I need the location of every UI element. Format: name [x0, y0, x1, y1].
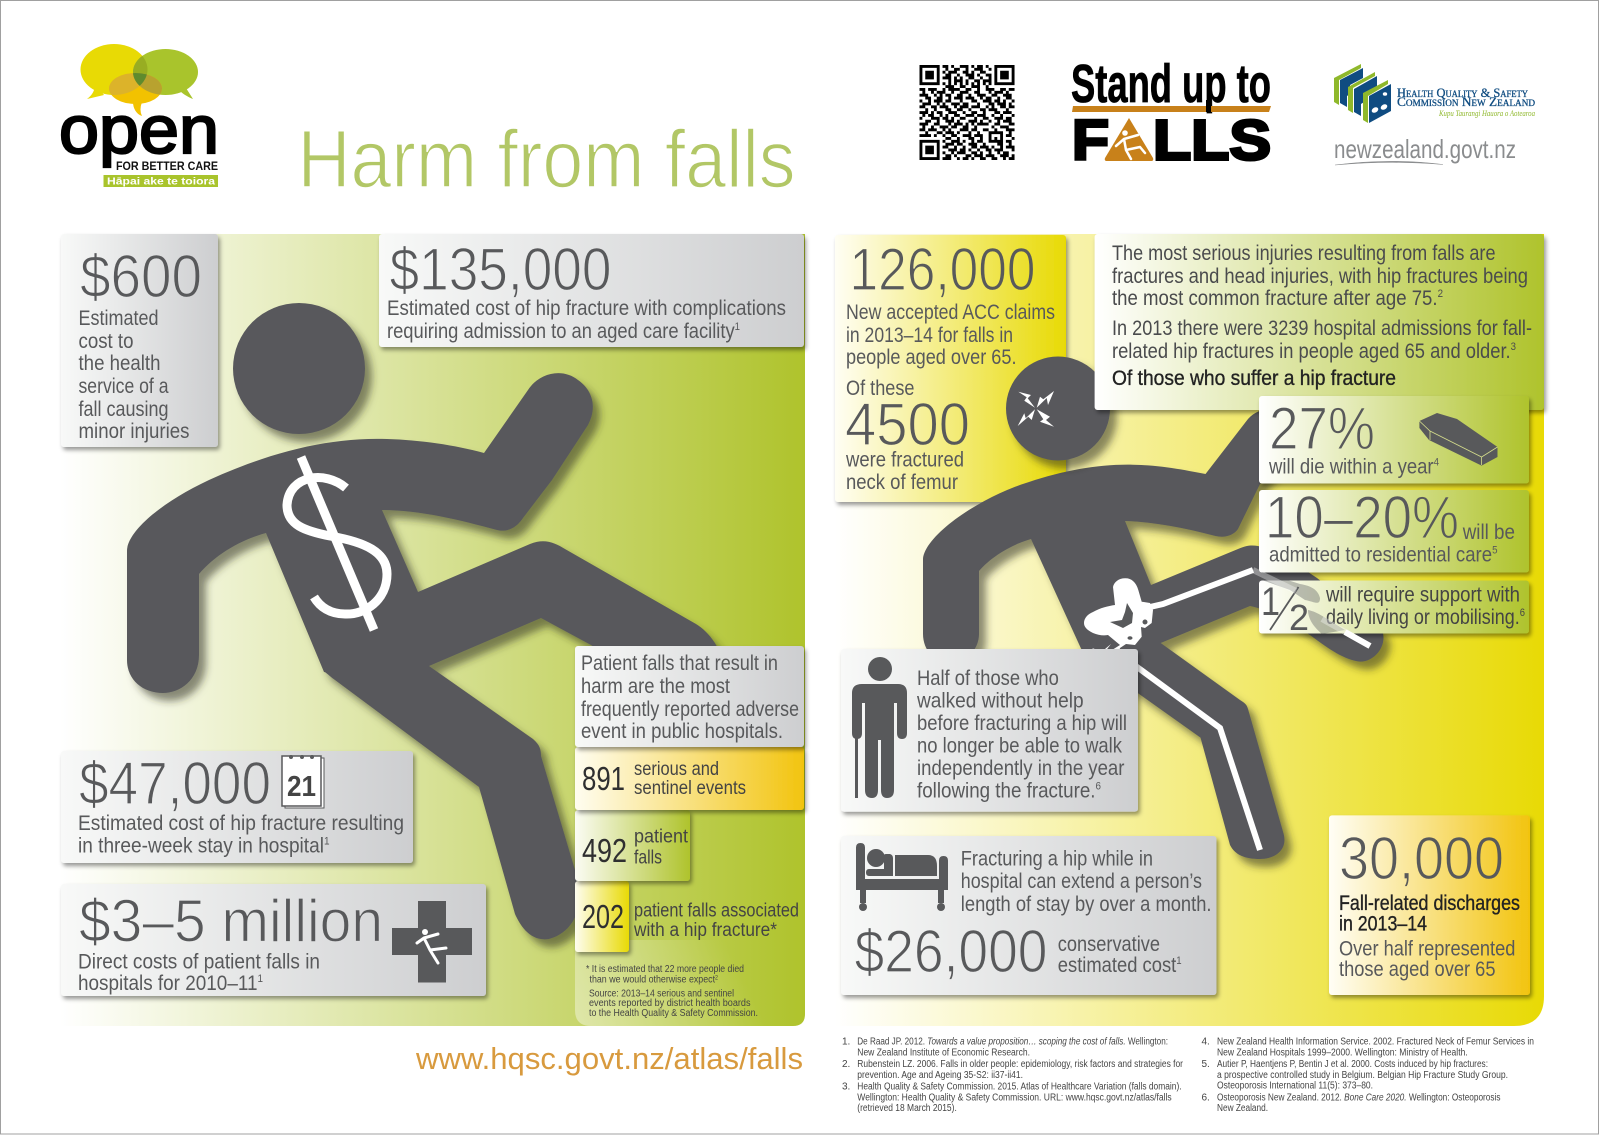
callout: 27% will die: 4 [1434, 457, 1439, 469]
bar: 891 serious and sentinel events: serious and [634, 759, 719, 780]
description: cost to [78, 330, 134, 353]
description: Of these [846, 377, 914, 400]
footnote and source: events reported by district health boards [589, 998, 750, 1009]
logo: stand up to falls [1071, 54, 1271, 172]
callout: serious injuries text: the most common fracture after age 75. [1112, 287, 1480, 310]
references: De Raad JP. 2012. Towards a value proposition… scoping the cost of falls. Wellington: [857, 1037, 1168, 1048]
maori name: Kupu Taurangi Hauora o Aotearoa [1438, 109, 1535, 118]
logo: open for better care [59, 44, 219, 188]
description: 1 [324, 836, 330, 848]
heading: stand up to: Stand up to [1071, 54, 1271, 114]
callout: $600 [61, 234, 218, 447]
icon: hospital bed [856, 843, 948, 911]
bone: pelvis [1084, 578, 1153, 656]
callout text: patient falls: harm are the most [581, 675, 730, 698]
callout: 30,000 discharges: Over half represented [1339, 938, 1515, 961]
bar: 492 patient falls [575, 810, 690, 881]
body [923, 409, 1383, 859]
dollar sign [287, 457, 387, 630]
description: fractured neck of femur [845, 449, 964, 494]
footnote and source: to the Health Quality & Safety Commission. [589, 1008, 758, 1019]
references: 3. [842, 1082, 850, 1093]
description [846, 301, 1055, 400]
head [1006, 356, 1110, 460]
references: Autier P, Haentjens P, Bentin J et al. 2000. Costs induced by hip fractures: [1217, 1059, 1488, 1070]
leg and bone seen through the one-half callout [1253, 570, 1370, 646]
references: 4. [1202, 1037, 1210, 1048]
description [78, 951, 320, 995]
fraction: one half: 1 [1261, 580, 1280, 624]
references [842, 1037, 1534, 1114]
description: hospitals for 2010–11 [78, 972, 277, 995]
commission name: Health Quality & Safety [1397, 85, 1528, 100]
callout: 30,000 discharges: Fall-related discharges [1339, 892, 1520, 915]
description: estimated cost [1058, 954, 1193, 977]
callout: 10-20% residential care: 5 [1492, 545, 1498, 557]
figure: 126,000 [850, 236, 1036, 303]
description: Estimated cost of hip fracture resulting [78, 812, 404, 835]
description: Estimated cost of hip fracture with complications [387, 297, 786, 320]
description: in three-week stay in hospital [78, 835, 349, 858]
callout: serious injuries text: fractures and head injuries, with hip fractures being [1112, 265, 1528, 288]
icon: calendar 21 [282, 755, 324, 808]
callout: serious injuries text: related hip fractures in people aged 65 and older. [1112, 340, 1568, 363]
references: Osteoporosis New Zealand. 2012. Bone Care 2020. Wellington: Osteoporosis [1217, 1092, 1500, 1103]
callout: 10-20% residential care: 10–20% [1265, 484, 1459, 551]
icon: commission blocks [1334, 64, 1391, 123]
callout: 30,000 discharges: 30,000 [1339, 825, 1504, 892]
icon: coffin [1419, 413, 1498, 466]
text: hospital can extend a person’s [961, 870, 1202, 893]
description [1058, 933, 1182, 977]
references: a prospective controlled study in Belgium. Belgian Hip Fracture Study Group. [1217, 1070, 1508, 1081]
callout: one half will require support: daily living or mobilising. [1326, 606, 1552, 629]
figure: $600 [80, 243, 202, 310]
footnote and source: Source: 2013–14 serious and sentinel [589, 989, 734, 1000]
callout: serious injuries text: The most serious injuries resulting from falls are [1112, 242, 1496, 265]
panel background [835, 234, 1544, 1026]
description: fall causing [78, 398, 168, 421]
letter F: F [1072, 108, 1109, 172]
subheading: Of those who suffer a hip fracture [1112, 367, 1396, 390]
figure: $3–5 million [79, 888, 383, 955]
description: conservative [1058, 933, 1160, 956]
references: New Zealand Hospitals 1999–2000. Wellington: Ministry of Health. [1217, 1047, 1468, 1058]
callout text: patient falls: Patient falls that result in [581, 652, 778, 675]
description: minor injuries [78, 420, 190, 443]
callout: 10-20% residential care: will be [1462, 521, 1515, 544]
text: length of stay by over a month. [961, 893, 1212, 916]
callout: serious injuries text: In 2013 there were 3239 hospital admissions for fall- [1112, 317, 1532, 340]
callout: 30,000 discharges: those aged over 65 [1339, 958, 1496, 981]
icon: calendar 21: 21 [287, 771, 316, 803]
references: Osteoporosis International 11(5): 373–80. [1217, 1081, 1373, 1092]
description: fractured neck of femur: were fractured [845, 449, 964, 472]
footnote and source: 2 [715, 976, 719, 982]
text [961, 848, 1212, 916]
logo: Health Quality and Safety Commission [1334, 64, 1536, 123]
icon: medical cross with falling figure [392, 901, 472, 982]
icon: falling figure with dollar sign [127, 303, 725, 939]
references: prevention. Age and Ageing 35-S2: ii37-ii41. [857, 1070, 1023, 1081]
bar: 202 patient falls associated with a hip fracture: patient falls associated [634, 900, 799, 922]
link: atlas url: www.hqsc.govt.nz/atlas/falls [415, 1041, 803, 1076]
footnote and source: than we would otherwise expect [590, 974, 731, 986]
references: (retrieved 18 March 2015). [857, 1103, 957, 1114]
head [233, 303, 365, 434]
bar: 202 patient falls associated with a hip fracture [575, 881, 799, 952]
references: 5. [1202, 1059, 1210, 1070]
description: the health [78, 352, 160, 375]
footnote and source [586, 964, 758, 1019]
callout: $3-5 million [61, 884, 486, 996]
maori tagline strip: Hāpai ake te toiora [107, 176, 216, 188]
description: Estimated [78, 307, 158, 330]
callout: serious injuries text: 2 [1438, 288, 1443, 300]
references: New Zealand. [1217, 1103, 1268, 1114]
icon: fracture bolts on hip [1092, 644, 1115, 664]
callout: one half will require support: 6 [1520, 607, 1525, 619]
text: independently in the year [917, 757, 1124, 780]
callout: 126,000 ACC claims [835, 235, 1066, 502]
letters LLS: LLS [1153, 108, 1271, 172]
references: Rubenstein LZ. 2006. Falls in older people: epidemiology, risk factors and strategies for [857, 1059, 1184, 1070]
callout text: patient falls: event in public hospitals. [581, 720, 783, 743]
bone: thigh and shin [1118, 653, 1260, 850]
description: service of a [78, 375, 169, 398]
icon: warning triangle with falling figure [1105, 118, 1153, 161]
description: requiring admission to an aged care facility [387, 320, 785, 343]
tagline: for better care: FOR BETTER CARE [116, 159, 218, 173]
wordmark: open: open [59, 92, 219, 168]
panel: hip fractures (right) [835, 234, 1544, 1026]
description [387, 297, 786, 343]
references: Health Quality & Safety Commission. 2015. Atlas of Healthcare Variation (falls domain). [857, 1082, 1182, 1093]
figure: $26,000 [854, 918, 1048, 985]
fraction: one half [1261, 580, 1309, 638]
callout: $47,000 [61, 750, 413, 863]
footnote and source: * It is estimated that 22 more people died [586, 964, 744, 975]
bar: 202 patient falls associated with a hip fracture: 202 [582, 898, 624, 935]
maori tagline strip [104, 175, 218, 188]
icon: person with cane [852, 657, 907, 798]
fraction: one half: 2 [1289, 597, 1309, 638]
bar: 891 serious and sentinel events: sentinel events [634, 778, 746, 799]
callout: 27% will die [1259, 395, 1529, 484]
title: Harm from falls [298, 114, 796, 205]
callout: serious injuries text [1095, 234, 1544, 410]
references: New Zealand Institute of Economic Research. [857, 1047, 1030, 1058]
commission name second line: Commission New Zealand [1397, 94, 1536, 109]
description: Direct costs of patient falls in [78, 951, 320, 974]
callout: 30,000 discharges: in 2013–14 [1339, 913, 1427, 936]
description: fractured neck of femur: neck of femur [846, 471, 958, 494]
body [127, 373, 725, 939]
icon: falling figure with hip bone [923, 356, 1383, 859]
description: people aged over 65. [846, 346, 1016, 369]
icon: QR code [920, 66, 1015, 159]
callout: serious injuries text: 3 [1511, 341, 1516, 353]
text [916, 667, 1127, 803]
underline bar [1072, 106, 1271, 112]
bar: 492 patient falls: patient [634, 827, 689, 848]
text: Fracturing a hip while in [961, 848, 1153, 870]
callout: one half will require support [1259, 580, 1529, 638]
description: 1 [1176, 955, 1182, 967]
callout: 27% will die: 27% [1269, 395, 1375, 462]
pelvis socket [1110, 603, 1148, 640]
references: Wellington: Health Quality & Safety Commission. URL: www.hqsc.govt.nz/atlas/falls [857, 1092, 1172, 1103]
panel background [60, 234, 805, 1026]
callout: 27% will die: will die within a year [1269, 456, 1456, 479]
bar: 202 patient falls associated with a hip fracture: with a hip fracture* [633, 920, 778, 941]
callout: $135,000 [379, 234, 804, 347]
figure: $47,000 [79, 750, 271, 817]
callout: one half will require support: will require support with [1325, 584, 1520, 607]
panel: cost of falls (left) [60, 234, 805, 1026]
icon: fracture bolts on head [1018, 391, 1054, 427]
text: 6 [1096, 781, 1101, 793]
text: before fracturing a hip will [917, 712, 1127, 735]
description: 1 [257, 973, 263, 985]
bar: 492 patient falls: falls [634, 848, 662, 868]
callout: half no longer walk independently [841, 649, 1138, 812]
description: 1 [735, 321, 740, 333]
bar: 492 patient falls: 492 [582, 832, 627, 869]
description: in 2013–14 for falls in [846, 324, 1013, 347]
sub-panel behind footnotes [575, 940, 805, 1026]
bone: raised leg upper [1150, 570, 1253, 607]
bar: 891 serious and sentinel events: 891 [582, 760, 625, 797]
figure: $135,000 [390, 236, 612, 303]
callout text: patient falls [575, 646, 804, 747]
references: 1. [842, 1037, 850, 1048]
logo: newzealand.govt.nz: newzealand.govt.nz [1334, 134, 1516, 164]
callout text: patient falls: frequently reported adverse [581, 698, 799, 721]
callout: adverse events stack [575, 646, 804, 1019]
description [78, 812, 404, 858]
text: no longer be able to walk [917, 735, 1122, 758]
text: walked without help [916, 690, 1084, 712]
callout: 10-20% residential care [1259, 484, 1529, 572]
references: 6. [1202, 1092, 1210, 1103]
description [78, 307, 190, 443]
references: New Zealand Health Information Service. 2002. Fractured Neck of Femur Services in [1217, 1037, 1534, 1048]
text: Half of those who [917, 667, 1059, 690]
bar: 891 serious and sentinel events [575, 747, 804, 810]
text: following the fracture. [917, 780, 1117, 803]
figure: 4500: 4500 [845, 391, 970, 458]
callout: 30,000 discharges [1329, 815, 1530, 995]
callout: 10-20% residential care: admitted to residential care [1269, 544, 1521, 567]
callout: $26,000 longer stay [841, 836, 1216, 995]
description: New accepted ACC claims [846, 301, 1055, 324]
references: 2. [842, 1059, 850, 1070]
icon: speech bubbles [80, 44, 198, 116]
